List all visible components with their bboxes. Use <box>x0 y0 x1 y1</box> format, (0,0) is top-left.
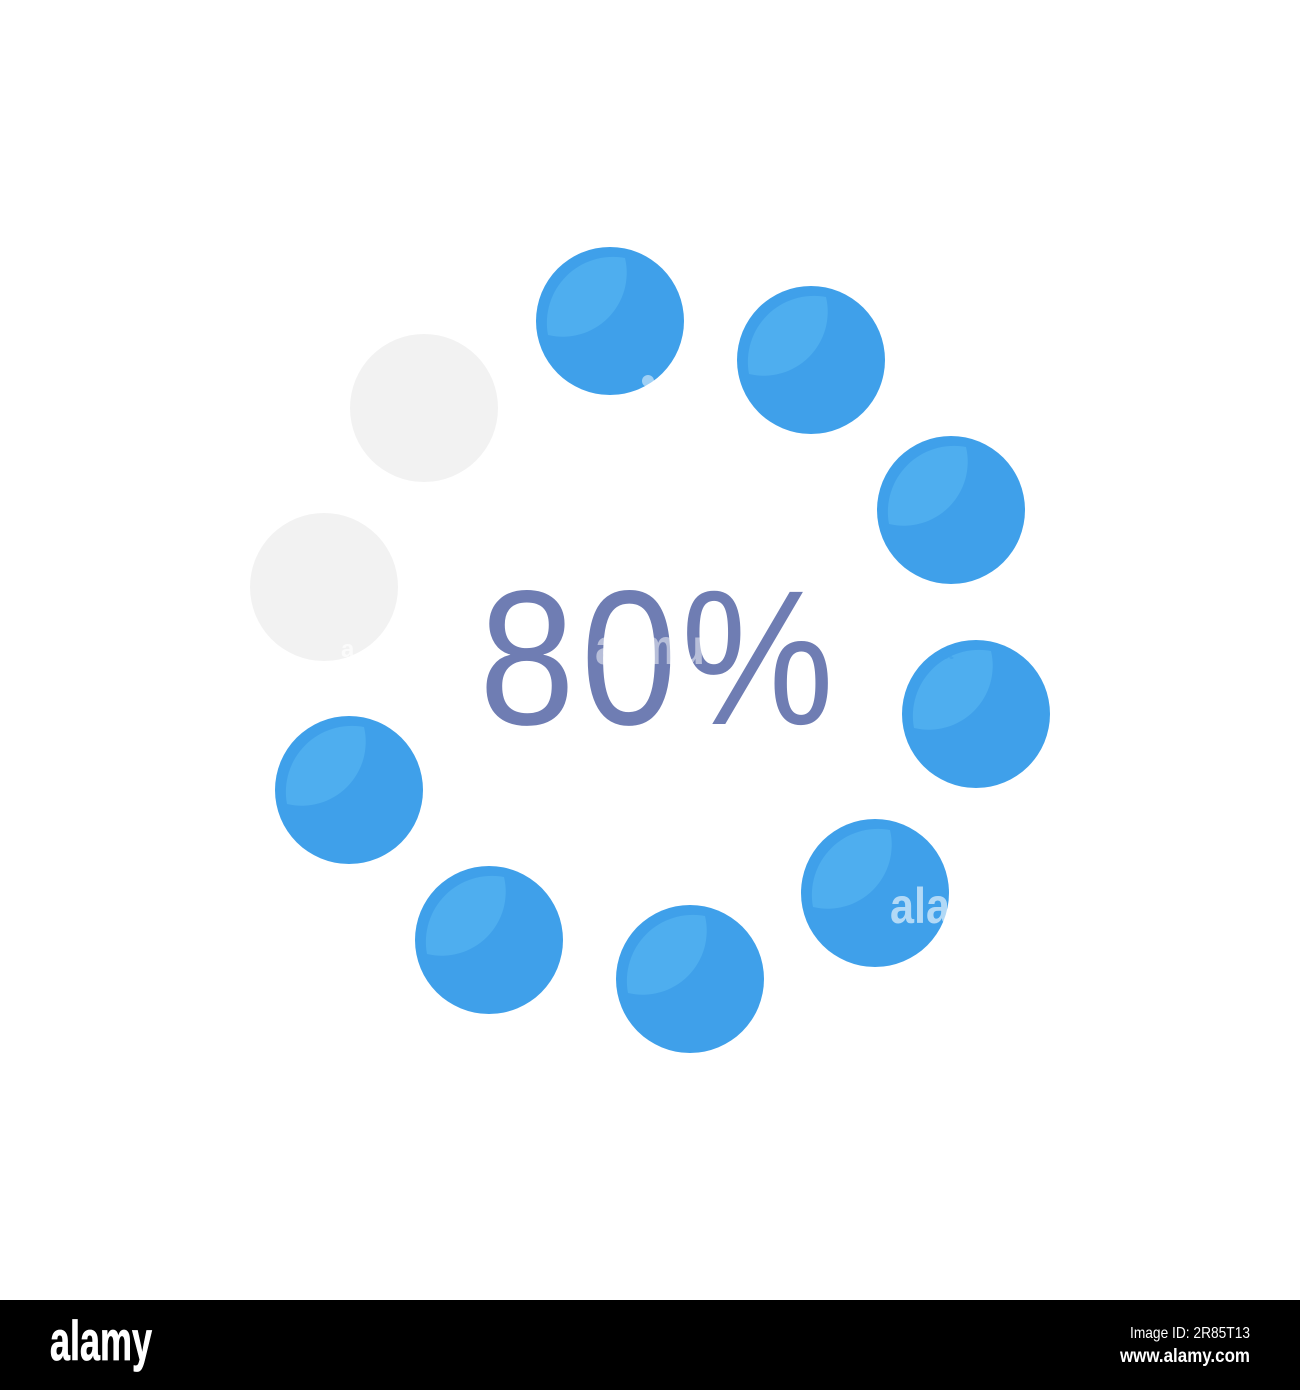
dot 10: empty <box>350 334 498 482</box>
watermark: dot 4 edge: a <box>941 639 954 664</box>
image id: Image ID: 2R85T13 <box>1130 1325 1250 1342</box>
website: www.alamy.com <box>1119 1346 1250 1367</box>
percentage label: % <box>681 550 834 765</box>
watermark: dot 9 edge: a <box>341 636 355 663</box>
dot 5: filled <box>801 819 949 967</box>
percentage label: 0 <box>581 550 677 765</box>
dot 4: filled <box>902 640 1050 788</box>
alamy logo: alamy <box>50 1309 152 1372</box>
watermark: dot 1 edge <box>642 375 654 387</box>
dot 3: filled <box>877 436 1025 584</box>
dot 1: filled <box>536 247 684 395</box>
dot 9: empty <box>250 513 398 661</box>
watermark: dot 5: ala <box>890 878 951 934</box>
percentage label: 8 <box>479 550 575 765</box>
footer bar <box>0 1300 1300 1390</box>
dot 2: filled <box>737 286 885 434</box>
watermark fragments <box>341 375 954 934</box>
dot 7: filled <box>415 866 563 1014</box>
progress ring <box>250 247 1050 1053</box>
dot 8: filled <box>275 716 423 864</box>
watermark: center: a mu <box>595 619 705 675</box>
dot 6: filled <box>616 905 764 1053</box>
percentage label <box>479 550 834 765</box>
